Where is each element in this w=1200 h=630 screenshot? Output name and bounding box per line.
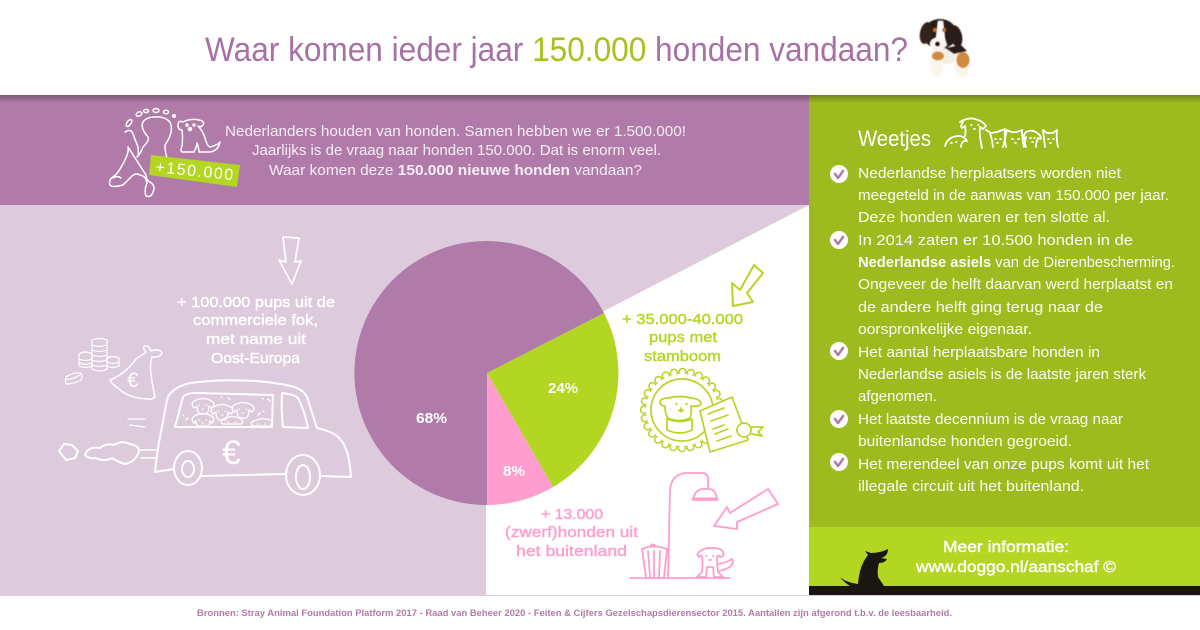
fact 1: Nederlandse herplaatsers worden niet bbox=[858, 166, 1121, 182]
footer rule bbox=[0, 595, 1200, 596]
pie value 68%: 68% bbox=[416, 410, 447, 427]
fact 2 bbox=[830, 231, 1175, 338]
callout: commercial breeding: + 100.000 pups uit de bbox=[177, 294, 335, 311]
callout: commercial breeding: Oost-Europa bbox=[211, 350, 301, 367]
callout: commercial breeding bbox=[177, 294, 335, 367]
fact 4: Het laatste decennium is de vraag naar bbox=[858, 412, 1123, 428]
icon: Netherlands map with dog bbox=[110, 108, 220, 196]
fact 1: meegeteld in de aanwas van 150.000 per jaar. bbox=[858, 188, 1169, 204]
icon: pedigree rosette and certificate bbox=[644, 372, 763, 452]
arrow: down to commercial share bbox=[279, 237, 301, 284]
heading: Weetjes: Weetjes bbox=[858, 126, 931, 151]
fact 2: Nederlandse asiels van de Dierenbescherming. bbox=[858, 255, 1175, 271]
link text: www.doggo.nl/aanschaf © bbox=[915, 559, 1117, 576]
callout: pedigree pups: + 35.000-40.000 bbox=[622, 311, 743, 328]
intro text: Nederlanders houden van honden. Samen hebben we er 1.500.000! bbox=[225, 123, 686, 140]
arrow: green to pedigree share bbox=[732, 265, 763, 306]
fact 2: oorspronkelijke eigenaar. bbox=[858, 322, 1032, 338]
callout: commercial breeding: met name uit bbox=[206, 331, 307, 348]
callout: pedigree pups: pups met bbox=[649, 329, 718, 346]
fact 1 bbox=[830, 165, 1169, 226]
icon: row of dogs and cats bbox=[945, 118, 1058, 148]
callout: stray dogs: + 13.000 bbox=[541, 506, 603, 523]
icon: puppy photo bbox=[918, 19, 970, 77]
pie chart bbox=[354, 241, 618, 505]
icon: car full of puppies with money bbox=[59, 338, 351, 495]
fact 1: Deze honden waren er ten slotte al. bbox=[858, 210, 1110, 226]
callout: stray dogs: (zwerf)honden uit bbox=[505, 524, 639, 541]
title: Waar komen ieder jaar 150.000 honden vandaan? bbox=[205, 31, 908, 69]
euro sign on bag: € bbox=[127, 369, 139, 392]
intro text: Waar komen deze 150.000 nieuwe honden vandaan? bbox=[269, 162, 642, 179]
pie value 24%: 24% bbox=[548, 380, 578, 397]
icon: street lamp, bin and dog bbox=[630, 473, 733, 578]
label: +150.000: +150.000 bbox=[155, 159, 235, 184]
icon: howling dog silhouette bbox=[840, 549, 888, 586]
callout: commercial breeding: commerciele fok, bbox=[193, 312, 318, 329]
intro text bbox=[225, 123, 686, 179]
link text bbox=[915, 539, 1117, 576]
panel: more information bbox=[809, 527, 1200, 595]
intro text: Jaarlijks is de vraag naar honden 150.000. Dat is enorm veel. bbox=[252, 142, 661, 159]
fact 5: Het merendeel van onze pups komt uit het bbox=[858, 457, 1149, 473]
callout: pedigree pups bbox=[622, 311, 743, 365]
fact 3: afgenomen. bbox=[858, 389, 937, 405]
fact 3: Het aantal herplaatsbare honden in bbox=[858, 345, 1100, 361]
fact 4: buitenlandse honden gegroeid. bbox=[858, 434, 1072, 450]
link text: Meer informatie: bbox=[943, 539, 1069, 556]
fact 3 bbox=[830, 342, 1147, 405]
fact 5: illegale circuit uit het buitenland. bbox=[858, 479, 1084, 495]
callout: pedigree pups: stamboom bbox=[644, 348, 721, 365]
label: +150.000 bbox=[149, 155, 240, 187]
callout: stray dogs bbox=[505, 506, 639, 560]
fact 3: Nederlandse asiels is de laatste jaren sterk bbox=[858, 367, 1147, 383]
panel: intro band bbox=[0, 95, 809, 205]
fact 4 bbox=[830, 410, 1123, 450]
panel: chart background bbox=[0, 205, 809, 595]
pie value 8%: 8% bbox=[503, 463, 525, 480]
euro sign on car: € bbox=[222, 434, 241, 472]
panel: facts bbox=[809, 95, 1200, 527]
fact 2: In 2014 zaten er 10.500 honden in de bbox=[858, 233, 1133, 249]
callout: stray dogs: het buitenland bbox=[516, 543, 627, 560]
fact 2: Ongeveer de helft daarvan werd herplaatst en bbox=[858, 277, 1173, 293]
checklist bbox=[830, 165, 1175, 495]
fact 2: de andere helft ging terug naar de bbox=[858, 300, 1103, 316]
footer sources: Bronnen: Stray Animal Foundation Platform 2017 - Raad van Beheer 2020 - Feiten & Cijfers Gezelschapsdierensector 2015. Aantallen zijn afgerond t.b.v. de leesbaarheid. bbox=[197, 608, 952, 619]
fact 5 bbox=[830, 453, 1149, 495]
arrow: pink to stray share bbox=[714, 489, 778, 529]
